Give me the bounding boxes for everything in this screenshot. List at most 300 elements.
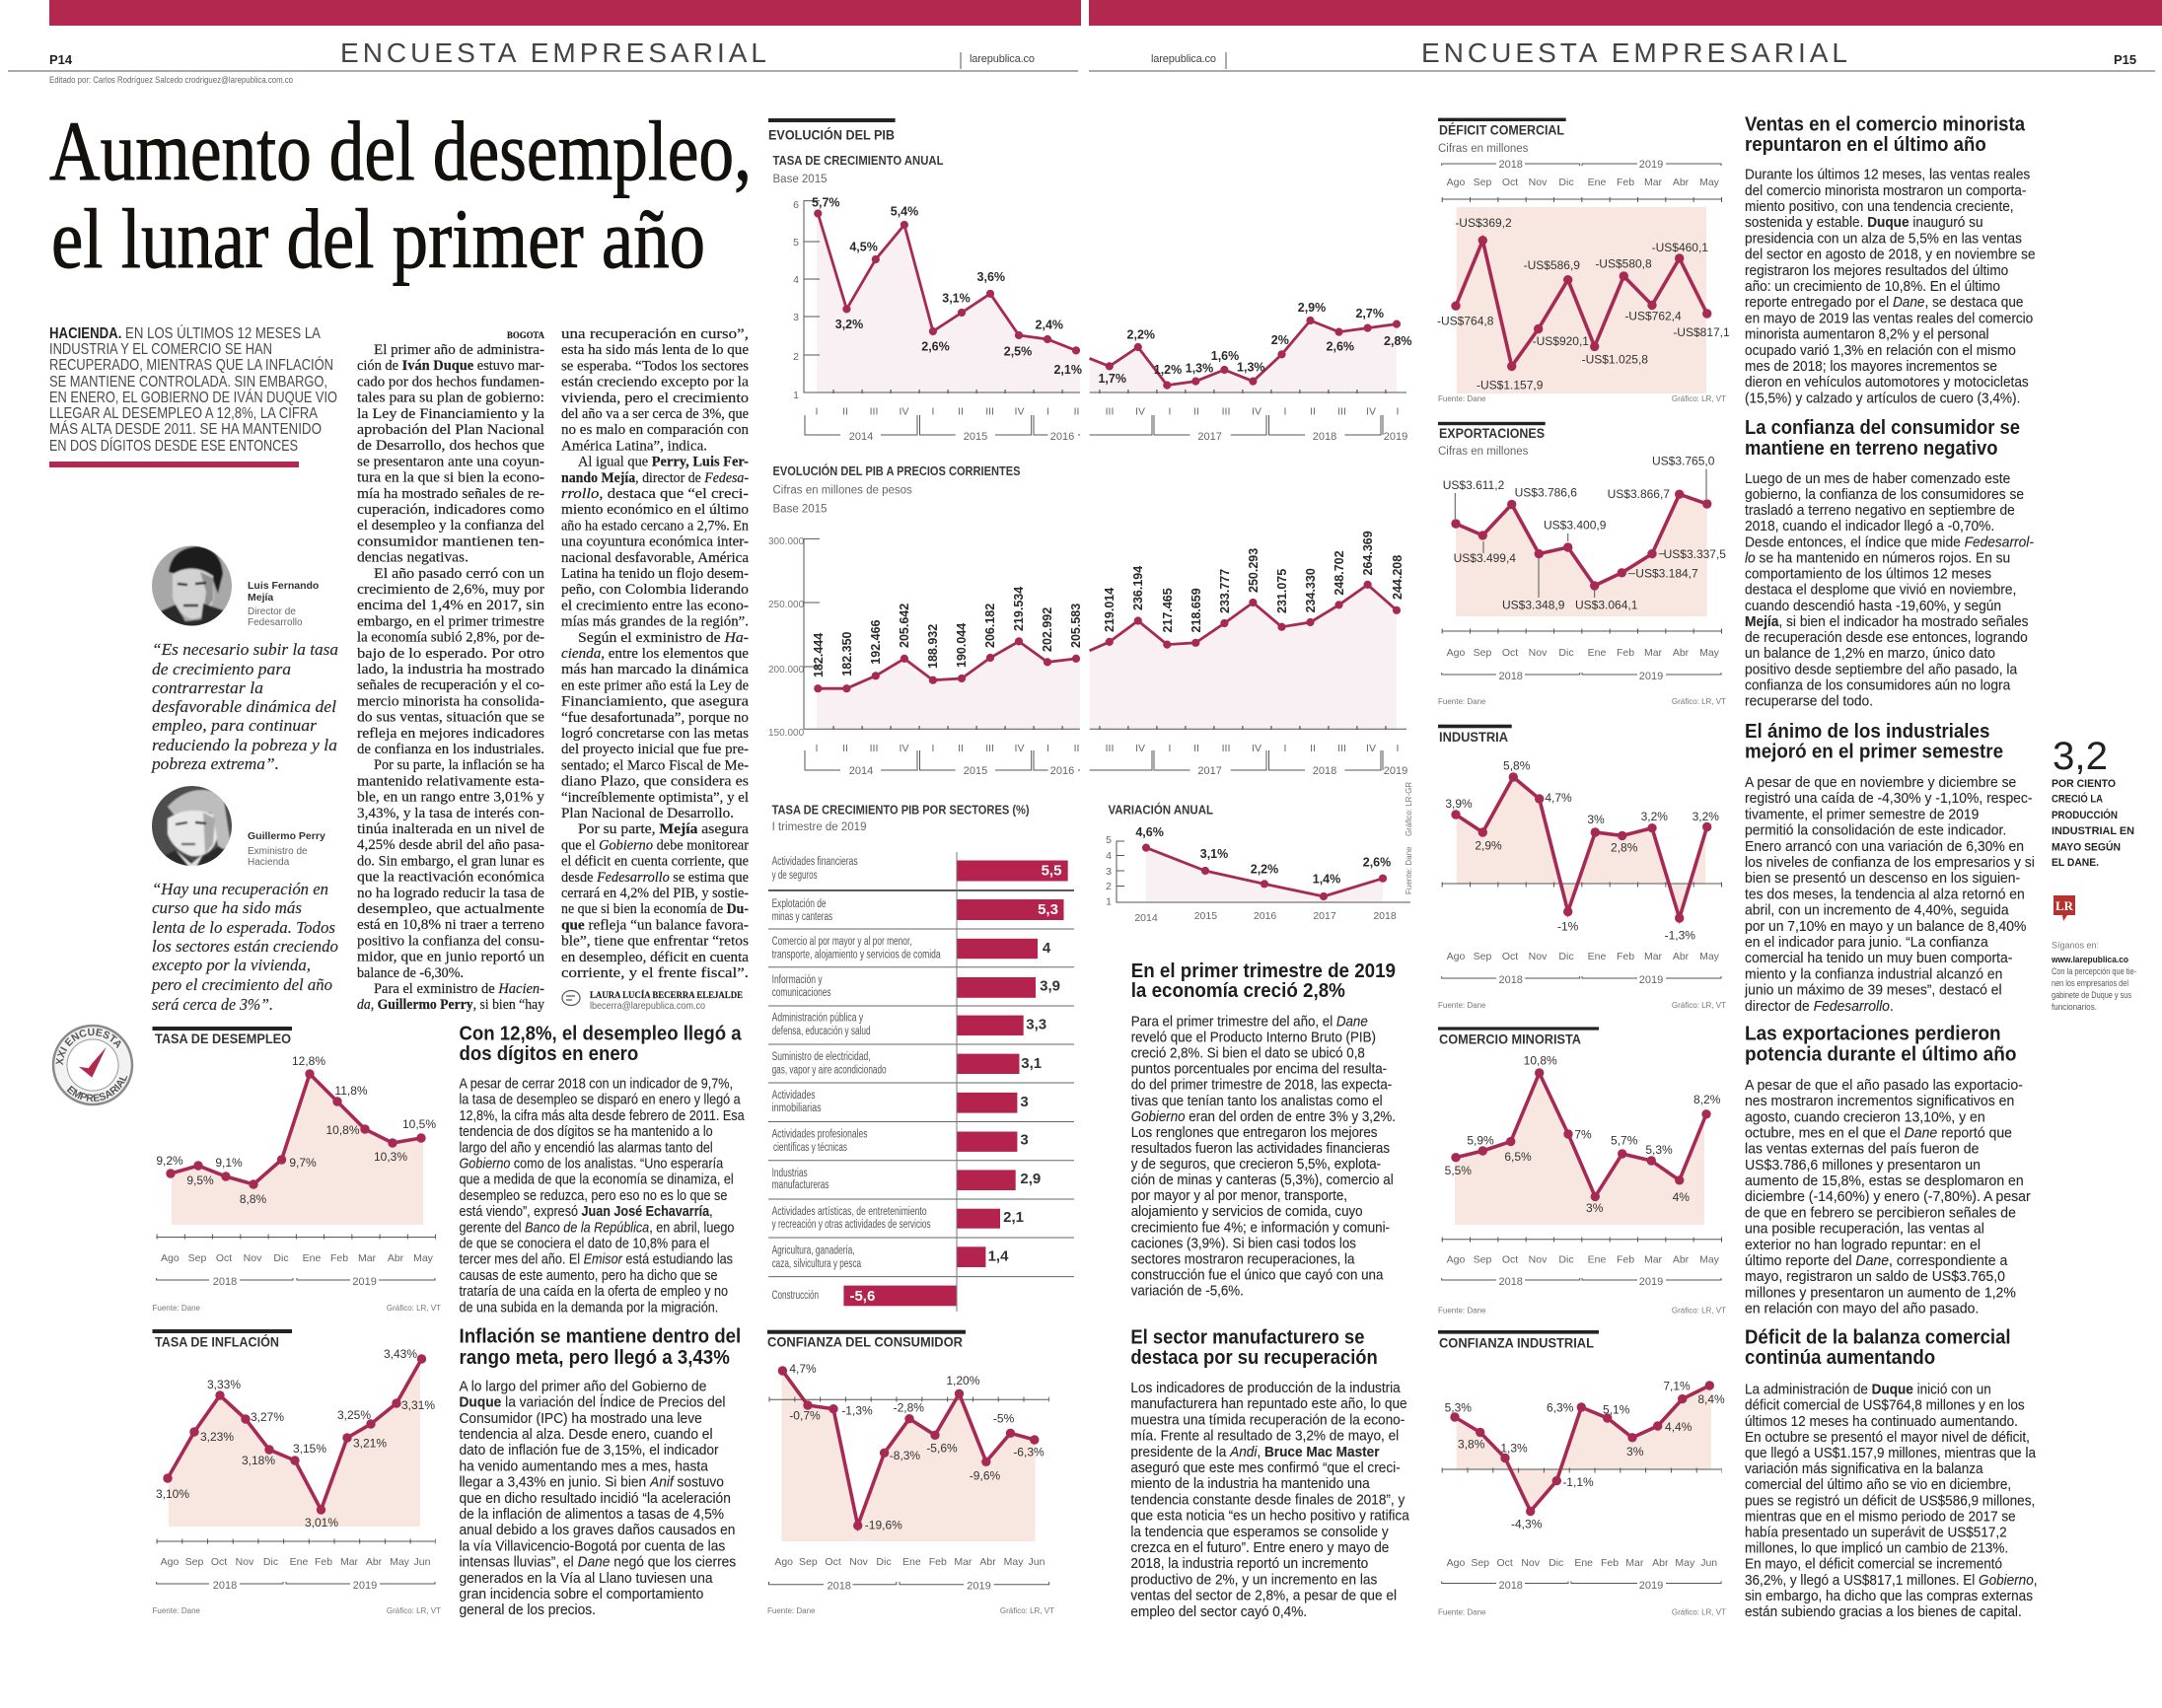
chart: tasa de inflación xyxy=(152,1329,441,1615)
value labels: 182.444 xyxy=(812,633,826,677)
body: US$3.786,6 millones y presentaron un xyxy=(1745,1158,1981,1174)
axis xyxy=(1117,841,1410,902)
main article column 1: mercio minorista ha consolida- xyxy=(357,693,544,709)
body: ción de minas y canteras (5,3%), comercio al xyxy=(1131,1172,1394,1187)
quote: Perry: pero el crecimiento del año xyxy=(151,975,332,994)
years xyxy=(1442,671,1721,682)
body: llegar a 3,43% en junio. Si bien Anif sostuvo xyxy=(460,1473,724,1490)
figure caption xyxy=(2052,778,2134,869)
seal: XXI Encuesta Empresarial xyxy=(51,1024,134,1106)
months: Jun xyxy=(414,1556,431,1568)
sector labels: caza, silvicultura y pesca xyxy=(772,1258,862,1270)
years: 2014 xyxy=(849,765,873,777)
main article column 1: positivo la confianza del consu- xyxy=(357,933,544,949)
y labels: 250.000 xyxy=(768,600,805,610)
years: 2018 xyxy=(213,1580,237,1592)
editor credit: Editado por: Carlos Rodríguez Salcedo crodriguez@larepublica.com.co xyxy=(49,75,293,85)
author name and email xyxy=(590,989,743,1012)
main article column 1: señales de recuperación y el co- xyxy=(357,677,544,693)
sector labels: comunicaciones xyxy=(772,987,831,999)
value labels: 3,9% xyxy=(1445,797,1473,811)
heading: Inflación se mantiene dentro del xyxy=(460,1325,741,1348)
line xyxy=(1146,848,1383,896)
quote panel: Guillermo Perry xyxy=(148,784,338,1014)
follow-us text: funcionarios. xyxy=(2052,1002,2097,1012)
body: Enero arrancó con una variación de 6,30% en xyxy=(1745,839,2024,855)
value labels: 2,6% xyxy=(921,339,950,353)
sector labels: científicas y técnicas xyxy=(773,1142,847,1154)
quarters: II xyxy=(842,743,848,754)
months: Feb xyxy=(1601,1557,1619,1569)
value labels: 234.330 xyxy=(1304,568,1318,612)
name and role: Perry xyxy=(248,830,325,868)
deck text xyxy=(49,325,337,467)
body: En octubre se presentó el mayor nivel de déficit, xyxy=(1745,1428,2030,1445)
body: creció 2,8%. Si bien el dato se ubicó 0,8 xyxy=(1131,1044,1365,1061)
value labels: 3,25% xyxy=(337,1408,371,1422)
main article column 2: logró concretarse con las metas xyxy=(561,726,749,742)
body: En mayo, el déficit comercial se incrementó xyxy=(1745,1555,2002,1572)
months: May xyxy=(1699,647,1720,659)
months: Sep xyxy=(188,1252,206,1264)
body: muestra una tímida recuperación de la econo- xyxy=(1130,1411,1405,1427)
months: Dic xyxy=(876,1556,892,1568)
months: Abr xyxy=(1673,177,1690,188)
figure caption: MAYO SEGÚN xyxy=(2052,841,2121,854)
quarters: II xyxy=(1193,406,1199,418)
y labels: 200.000 xyxy=(768,665,805,676)
main article column 1: Para el exministro de Hacien- xyxy=(374,981,544,997)
body: mes de 2018; los mayores incrementos se xyxy=(1745,358,1997,374)
figure caption: EL DANE. xyxy=(2052,857,2099,869)
main article column 2: una coyuntura económica inter- xyxy=(561,534,749,550)
main article column 2: sentado; el Marco Fiscal de Me- xyxy=(561,757,749,773)
quarters: II xyxy=(1310,406,1316,418)
body: tes dos meses, la tendencia al alza retornó en xyxy=(1745,887,2025,902)
value labels: 4,4% xyxy=(1665,1420,1693,1434)
bar values: 3 xyxy=(1020,1132,1029,1149)
sector labels xyxy=(772,856,941,1302)
main article column 1: embargo, en el primer trimestre xyxy=(357,613,544,629)
y labels: 5 xyxy=(1106,834,1112,846)
body: reveló que el Producto Interno Bruto (PIB) xyxy=(1131,1029,1376,1045)
sidebar xyxy=(2051,735,2136,1012)
y labels: 2 xyxy=(793,351,799,363)
value labels: -5% xyxy=(993,1412,1015,1426)
subtitle: tasa anual xyxy=(773,154,944,185)
icon: LR logo xyxy=(2054,895,2075,921)
quarters: III xyxy=(870,406,878,418)
value labels: 3,21% xyxy=(353,1436,387,1450)
months: Feb xyxy=(315,1556,332,1568)
months: Ago xyxy=(774,1556,793,1568)
body: Luego de un mes de haber comenzado este xyxy=(1745,469,2010,486)
main article column 1: crecimiento de 2,6%, muy por xyxy=(357,582,544,598)
body: puntos porcentuales por encima del resulta- xyxy=(1131,1060,1387,1077)
months: Abr xyxy=(1673,647,1690,659)
portrait: Mejía xyxy=(152,546,232,625)
name and role: Perry: Exministro de xyxy=(248,846,308,857)
body: tendencia al alza. Desde enero, cuando el xyxy=(460,1426,713,1442)
follow-us text: Síganos en: xyxy=(2052,941,2099,951)
chart title xyxy=(772,804,1030,833)
body: del sector en agosto de 2018, y en noviembre se xyxy=(1745,246,2036,262)
months: Sep xyxy=(1474,647,1491,659)
y labels: 1 xyxy=(793,390,799,401)
body: (15,5%) y calzado y artículos de cuero (3,4%). xyxy=(1745,390,2020,405)
quarters: II xyxy=(1310,743,1316,754)
subtitle: precios corrientes: Base 2015 xyxy=(773,504,827,516)
value labels: 4,7% xyxy=(789,1362,817,1376)
source: Fuente: Dane xyxy=(1438,1001,1486,1010)
bar values: 3,1 xyxy=(1021,1055,1042,1072)
main article column 1: do. Sin embargo, el gran lunar es xyxy=(357,853,544,869)
body: los niveles de confianza de los empresarios y si xyxy=(1745,855,2035,871)
y labels: 6 xyxy=(793,199,799,211)
body: millones y presentaron un aumento de 1,2% xyxy=(1745,1285,2016,1301)
source: Gráfico: LR, VT xyxy=(1672,1306,1726,1315)
source: Fuente: Dane xyxy=(1438,697,1486,706)
value labels: 11,8% xyxy=(334,1084,368,1098)
body: trasladó a terreno negativo en septiembre de xyxy=(1745,502,2015,518)
value labels: 2,5% xyxy=(1004,345,1032,359)
sector labels: y recreación y otras actividades de servicios xyxy=(772,1219,931,1231)
value labels: US$3.348,9 xyxy=(1502,599,1565,612)
months: May xyxy=(1699,177,1720,188)
main article column 2: nando Mejía, director de Fedesa- xyxy=(561,470,749,486)
main article column 1: consumidor mantienen ten- xyxy=(357,534,544,549)
value labels: 7% xyxy=(1574,1128,1592,1142)
value labels: 5,7% xyxy=(1611,1134,1638,1148)
years: 2019 xyxy=(967,1581,991,1593)
months: Ene xyxy=(1588,647,1606,659)
quarters: IV xyxy=(1015,406,1024,418)
months: Ene xyxy=(1574,1557,1593,1569)
months: May xyxy=(390,1556,410,1568)
axis xyxy=(157,1540,436,1542)
main article column 2: Financiamiento, que asegura xyxy=(561,694,750,710)
main article column 1: bajo de lo esperado. Por otro xyxy=(357,646,544,662)
months: Jun xyxy=(1700,1557,1717,1569)
sector labels: gas, vapor y aire acondicionado xyxy=(772,1065,887,1077)
main article column 1: mía ha mostrado señales de re- xyxy=(357,486,544,502)
body: variación de -5,6%. xyxy=(1131,1282,1244,1299)
main article column 1: da, Guillermo Perry, si bien “hay xyxy=(357,997,545,1013)
main article column 2: miento económico en el último xyxy=(561,502,749,518)
value labels xyxy=(1445,758,1719,942)
value labels: 202.992 xyxy=(1041,607,1054,652)
sector labels: minas y canteras xyxy=(772,911,832,923)
main article column 2: el crecimiento entre las econo- xyxy=(561,598,749,613)
name and role: Perry: Guillermo Perry xyxy=(248,830,325,842)
body: miento positivo, con una tendencia creciente, xyxy=(1745,198,2014,214)
heading xyxy=(460,1325,741,1369)
months: Mar xyxy=(1625,1557,1644,1569)
page number: P14 xyxy=(49,52,73,67)
value labels: US$3.765,0 xyxy=(1652,454,1715,467)
source xyxy=(1438,1607,1726,1617)
body: millones, lo que implicó un cambio de 213%. xyxy=(1745,1539,2008,1556)
body: presidente de la Andi, Bruce Mac Master xyxy=(1130,1443,1380,1459)
area xyxy=(1457,207,1706,393)
value labels: 250.293 xyxy=(1247,548,1261,593)
body: confianza de los consumidores aún no logra xyxy=(1745,676,2010,693)
quarters: III xyxy=(870,743,878,754)
body: 12,8%, la cifra más alta desde febrero de 2011. Esa xyxy=(460,1107,745,1123)
months: Ago xyxy=(1447,1253,1465,1265)
red band right xyxy=(1089,0,2162,26)
value labels: -US$764,8 xyxy=(1437,314,1494,327)
source: Gráfico: LR, VT xyxy=(1672,1607,1726,1617)
body xyxy=(1745,469,2034,709)
main article column 2: que el Gobierno debe monitorear xyxy=(561,837,749,853)
value labels: 217.465 xyxy=(1161,588,1175,633)
body: construcción fue el único que cayó con una xyxy=(1131,1266,1384,1283)
value labels: US$3.866,7 xyxy=(1608,487,1670,501)
body xyxy=(460,1378,736,1617)
body: Consumidor (IPC) ha mostrado una leve xyxy=(460,1409,702,1426)
months: Nov xyxy=(1521,1557,1541,1569)
value labels xyxy=(1437,216,1730,392)
body: 2018, cuando el indicador llegó a -0,70%. xyxy=(1745,518,1994,534)
y labels xyxy=(793,199,799,401)
value labels: 244.208 xyxy=(1391,555,1405,600)
main article column 2: diano Plazo, que considera es xyxy=(561,774,749,790)
months: Mar xyxy=(954,1556,973,1568)
chart title xyxy=(1438,422,1546,458)
body: ocupado varió 1,3% en relación con el mismo xyxy=(1745,341,2016,358)
body: había presentado un superávit de US$517,2 xyxy=(1745,1524,2007,1540)
value labels: 205.642 xyxy=(898,604,911,648)
body: crezca en el futuro”. Entre enero y mayo de xyxy=(1130,1539,1390,1555)
value labels xyxy=(1445,1380,1725,1531)
body: director de Fedesarrollo. xyxy=(1745,999,1894,1015)
value labels: 4,7% xyxy=(1545,791,1572,805)
quarters: II xyxy=(1074,406,1079,418)
value labels: -US$460,1 xyxy=(1652,241,1708,254)
body: tercer mes del año. El Emisor está estudiando las xyxy=(460,1251,733,1267)
value labels: 3,15% xyxy=(293,1442,326,1456)
quarters: I xyxy=(816,406,818,418)
body: Para el primer trimestre del año, el Dane xyxy=(1131,1013,1368,1030)
months: Abr xyxy=(366,1556,383,1568)
main article column 1: mantenido relativamente esta- xyxy=(357,773,544,789)
body: en el indicador para junio. “La confianza xyxy=(1745,935,1988,951)
source xyxy=(1438,394,1726,403)
heading: mejoró en el primer semestre xyxy=(1745,741,2003,763)
body: miento de la industria ha mantenido una xyxy=(1130,1475,1370,1491)
heading xyxy=(1745,1327,2011,1369)
value labels: 3,01% xyxy=(305,1516,338,1530)
body: trataría de una caída en la oferta de empleo y no xyxy=(460,1283,728,1299)
chart title: Cifras en millones xyxy=(1438,446,1529,458)
months: Mar xyxy=(340,1556,359,1568)
source: Gráfico: LR, VT xyxy=(387,1304,441,1313)
chart title xyxy=(152,1329,292,1349)
body: en mayo de 2019 las ventas reales del comercio xyxy=(1745,310,2033,325)
value labels: 12,8% xyxy=(292,1054,325,1068)
value labels: 2,8% xyxy=(1384,334,1412,348)
value labels: -US$817,1 xyxy=(1673,325,1730,339)
quarters: IV xyxy=(900,743,908,754)
source: Fuente: Dane xyxy=(1405,846,1413,894)
quote: Mejía: de crecimiento para xyxy=(152,660,291,678)
months xyxy=(774,1556,1045,1568)
bar values: 3 xyxy=(1020,1094,1029,1110)
main article column 1: balance de -6,30%. xyxy=(357,965,464,981)
deck red rule xyxy=(49,462,299,467)
months: May xyxy=(1699,1253,1720,1265)
author name and email: LAURA LUCÍA BECERRA ELEJALDE xyxy=(590,989,743,1001)
main article column 2: América Latina”, indica. xyxy=(561,438,707,454)
quarters: III xyxy=(1222,406,1230,418)
deck text: MÁS ALTA DESDE 2011. SE HA MANTENIDO xyxy=(49,421,322,438)
years: 2019 xyxy=(1639,1276,1663,1288)
body: presidencia con un alza de 5,5% en las ventas xyxy=(1745,230,2022,246)
heading: la economía creció 2,8% xyxy=(1131,979,1345,1002)
chart title: EXPORTACIONES xyxy=(1439,426,1545,441)
bar values: 1,4 xyxy=(988,1248,1009,1265)
line xyxy=(782,1371,1035,1526)
sector labels: defensa, educación y salud xyxy=(772,1026,871,1037)
years: 2015 xyxy=(964,765,987,777)
main article column 1: está en 10,8% ni traer a terreno xyxy=(357,917,544,933)
bar values: 4 xyxy=(1043,940,1051,957)
axis xyxy=(1442,630,1722,632)
value labels: 1,6% xyxy=(1211,349,1239,363)
heading: continúa aumentando xyxy=(1745,1347,1935,1369)
years: 2018 xyxy=(1498,671,1523,682)
quarters: III xyxy=(985,743,994,754)
icon: speech bubble xyxy=(562,990,580,1006)
value labels: 2,6% xyxy=(1363,856,1391,870)
line xyxy=(818,585,1397,688)
body: tivas que tenían tanto los analistas como el xyxy=(1131,1092,1383,1108)
main article column 1: tura en la que si bien la econo- xyxy=(357,470,544,486)
months: Abr xyxy=(1673,951,1690,962)
quarters: I xyxy=(1284,406,1286,418)
months: Abr xyxy=(979,1556,996,1568)
value labels: -5,6% xyxy=(926,1441,958,1455)
heading: potencia durante el último año xyxy=(1745,1043,2017,1066)
body: anual debido a los graves daños causados en xyxy=(460,1522,735,1537)
area xyxy=(1457,1386,1711,1511)
months: Nov xyxy=(849,1556,869,1568)
value labels: 10,8% xyxy=(1524,1053,1557,1067)
zero axis xyxy=(769,1398,1049,1400)
area xyxy=(781,1371,1036,1541)
body: tendencia de dos dígitos se ha mantenido a lo xyxy=(460,1123,713,1139)
main article column 1: el desempleo y la confianza del xyxy=(357,518,544,534)
body xyxy=(1131,1013,1396,1299)
years xyxy=(1442,974,1721,986)
body: sostenida y estable. Duque inauguró su xyxy=(1745,214,1983,230)
body: Gobierno como de los analistas. “Uno esperaría xyxy=(460,1156,723,1172)
value labels: 3,2% xyxy=(1693,810,1719,823)
quarters: IV xyxy=(1366,743,1376,754)
article: desempleo xyxy=(460,1024,745,1316)
header: page 15 xyxy=(1089,0,2162,71)
chart title xyxy=(1438,1027,1599,1047)
value labels: -19,6% xyxy=(865,1519,902,1532)
months: Sep xyxy=(1474,177,1491,188)
years: 2019 xyxy=(1639,159,1663,171)
body: tivamente, el primer semestre de 2019 xyxy=(1745,807,1979,822)
subtitle: precios corrientes: Cifras en millones de pesos xyxy=(773,485,912,497)
main article column 2: del año va a ser cerca de 3%, que xyxy=(561,406,749,422)
value labels: 2,9% xyxy=(1298,301,1326,315)
chart title: I trimestre de 2019 xyxy=(772,821,866,833)
body: ventas del sector de 2,8%, a pesar de que el xyxy=(1130,1587,1397,1603)
value labels: 2,7% xyxy=(1355,307,1384,320)
years: 2019 xyxy=(1639,671,1663,682)
value labels: 205.583 xyxy=(1069,604,1083,648)
area xyxy=(1456,494,1707,616)
chart title: CONFIANZA INDUSTRIAL xyxy=(1439,1335,1594,1350)
value labels: 9,7% xyxy=(289,1156,317,1170)
panel: evolución del PIB xyxy=(768,118,1412,777)
months: May xyxy=(1675,1557,1695,1569)
row dividers xyxy=(768,890,1074,1277)
subtitle: precios corrientes: EVOLUCIÓN DEL PIB A PRECIOS CORRIENTES xyxy=(773,463,1020,478)
sector labels: Información y xyxy=(772,974,823,986)
years: 2018 xyxy=(1498,159,1523,171)
value labels: 4,6% xyxy=(1135,825,1164,839)
axis xyxy=(956,852,958,1312)
quote: Perry xyxy=(151,880,338,1014)
value labels: 1,20% xyxy=(946,1374,980,1388)
sector labels: Actividades profesionales xyxy=(772,1129,868,1141)
name and role: Mejía: Mejía xyxy=(248,592,273,604)
months: Ene xyxy=(1588,177,1606,188)
area xyxy=(1455,1073,1704,1225)
chart title: CONFIANZA DEL CONSUMIDOR xyxy=(767,1335,963,1350)
value labels: 9,2% xyxy=(156,1154,183,1168)
body xyxy=(1130,1380,1409,1619)
main article column 1: cuperación, indicadores como xyxy=(357,502,544,518)
sector labels: Suministro de electricidad, xyxy=(772,1051,871,1063)
body: 36,2%, y llegó a US$817,1 millones. El Gobierno, xyxy=(1745,1571,2038,1588)
months: Feb xyxy=(330,1252,348,1264)
main article column 2: “increíblemente optimista”, y el xyxy=(561,790,749,806)
value labels: 3,1% xyxy=(942,292,971,306)
body: las ventas externas del país fueron de xyxy=(1745,1142,1979,1158)
axis xyxy=(804,201,1406,392)
source xyxy=(1438,1306,1726,1315)
years: 2019 xyxy=(1639,1580,1663,1592)
value labels: US$3.184,7 xyxy=(1635,567,1698,581)
value labels: -2,8% xyxy=(894,1401,924,1415)
follow-us text: gabinete de Duque y sus xyxy=(2052,990,2131,1000)
value labels: -8,3% xyxy=(890,1449,920,1462)
value labels: 7,1% xyxy=(1663,1380,1691,1393)
main article column 1: de confianza en los industriales. xyxy=(357,742,544,757)
value labels: 1,3% xyxy=(1237,360,1265,374)
body: resultados fueron las actividades financieras xyxy=(1131,1139,1390,1156)
section title right: ENCUESTA EMPRESARIAL xyxy=(1421,37,1847,68)
main article column 2: más han marcado la dinámica xyxy=(561,662,750,677)
body: aseguró que este mes confirmó “que el creci- xyxy=(1130,1459,1401,1475)
main article column 1: 4,25% desde abril del año pasa- xyxy=(357,837,544,853)
axis xyxy=(157,1236,436,1239)
months xyxy=(161,1556,431,1568)
value labels: 5,3% xyxy=(1445,1401,1472,1415)
value labels: 1,4% xyxy=(1313,873,1340,887)
name and role: Mejía: Director de xyxy=(248,606,296,617)
months: Oct xyxy=(1502,1253,1518,1265)
body xyxy=(460,1076,745,1316)
quarters: III xyxy=(1337,743,1346,754)
